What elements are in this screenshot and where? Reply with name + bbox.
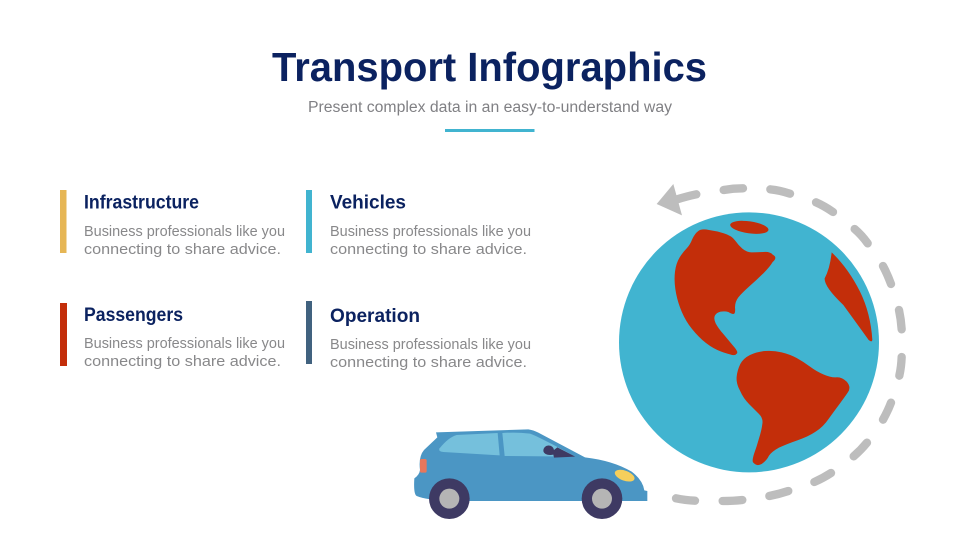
arrowhead: [657, 184, 682, 215]
panel: operation: [306, 301, 531, 371]
subtitle: Present complex data in an easy-to-understand way: [308, 99, 672, 116]
text block: infrastructure: Business professionals like you: [84, 223, 285, 240]
accent bar: vehicles: [306, 190, 312, 253]
title underline: [445, 129, 534, 132]
text block: passengers: Business professionals like you: [84, 335, 285, 352]
text block: operation: Business professionals like you: [330, 336, 531, 353]
text block: passengers: connecting to share advice.: [84, 353, 281, 370]
front window: [502, 433, 575, 457]
text block: vehicles: connecting to share advice.: [330, 241, 527, 258]
accent bar: operation: [306, 301, 312, 364]
icon: globe: [619, 212, 879, 472]
text block: passengers: [84, 335, 285, 370]
text block: vehicles: Business professionals like you: [330, 223, 531, 240]
panel: vehicles: [306, 190, 531, 258]
front wheel: [582, 478, 622, 519]
arrow: dashed circular path: [657, 184, 902, 501]
heading: infrastructure: Infrastructure: [84, 192, 199, 214]
text block: infrastructure: [84, 223, 285, 258]
driver: [543, 446, 575, 458]
panel: infrastructure: [60, 190, 285, 258]
heading: passengers: Passengers: [84, 305, 183, 326]
panel: passengers: [60, 303, 285, 370]
text block: operation: connecting to share advice.: [330, 354, 527, 371]
tail light: [420, 459, 427, 473]
text block: infrastructure: connecting to share advice.: [84, 241, 281, 258]
rear wheel: [429, 478, 470, 519]
icon: car: [414, 429, 647, 519]
car body: [414, 429, 647, 501]
text block: operation: [330, 336, 531, 371]
rear window: [439, 433, 500, 455]
heading: vehicles: Vehicles: [330, 192, 406, 214]
headlight: [613, 467, 636, 484]
accent bar: passengers: [60, 303, 67, 366]
title: Transport Infographics: [272, 44, 707, 90]
heading: operation: Operation: [330, 306, 420, 327]
accent bar: infrastructure: [60, 190, 66, 253]
text block: vehicles: [330, 223, 531, 258]
